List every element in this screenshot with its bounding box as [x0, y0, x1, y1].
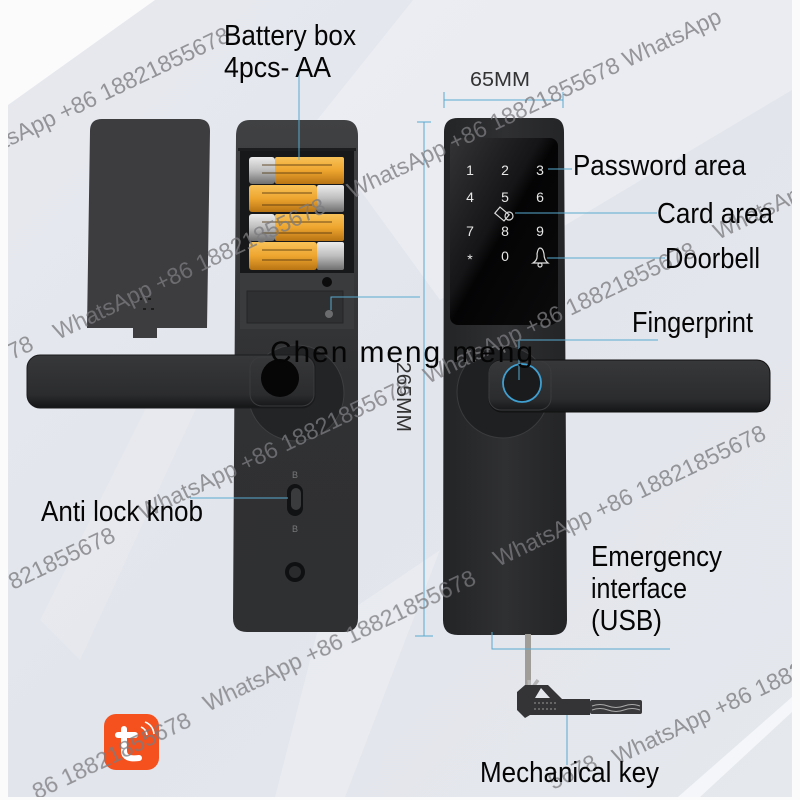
panel: front of lock — [443, 118, 770, 635]
touch keypad: 7 — [466, 223, 474, 239]
anti lock knob — [287, 470, 303, 534]
label: fingerprint: Fingerprint — [632, 307, 753, 339]
label: card area: Card area — [657, 198, 774, 230]
label: mechanical key: Mechanical key — [480, 757, 659, 789]
label: emergency interface: (USB) — [591, 605, 662, 637]
icon: Tuya app logo — [104, 714, 159, 770]
battery 1 — [249, 157, 344, 184]
watermarks: 821855678 — [4, 521, 119, 595]
touch keypad — [450, 138, 558, 325]
label: emergency interface: interface — [591, 573, 687, 605]
right handle with fingerprint sensor — [489, 360, 770, 412]
label: battery box: Battery box — [224, 20, 356, 52]
battery 2 — [249, 185, 344, 212]
touch keypad: 4 — [466, 189, 474, 205]
watermarks: WhatsApp +86 18821855678 WhatsApp — [343, 3, 725, 204]
touch keypad: 8 — [501, 223, 509, 239]
emergency keyhole — [285, 562, 305, 582]
touch keypad: 2 — [501, 162, 509, 178]
panel: battery cover — [87, 119, 210, 338]
touch keypad: * — [467, 251, 473, 267]
label: doorbell: Doorbell — [665, 243, 760, 275]
watermarks: WhatsApp +86 18821855678 — [419, 236, 700, 389]
label: password area: Password area — [573, 150, 747, 182]
anti lock knob: B — [292, 470, 298, 480]
rose left — [248, 345, 344, 441]
fingerprint ring — [503, 364, 541, 402]
touch keypad: 9 — [536, 223, 544, 239]
icon: card — [495, 207, 513, 221]
watermarks: WhatsApp +86 18821855678 — [199, 564, 480, 717]
watermarks: 78 — [3, 330, 37, 365]
watermarks: WhatsApp +86 18821855678 — [489, 419, 770, 572]
icon: doorbell — [533, 248, 548, 267]
battery 3 — [249, 214, 344, 241]
battery 4 — [249, 242, 344, 270]
touch keypad: 1 — [466, 162, 474, 178]
watermarks: 5678 — [544, 749, 601, 795]
label: emergency interface: Emergency — [591, 541, 722, 573]
dimension: width: 65MM — [470, 69, 530, 91]
battery compartment — [240, 151, 354, 273]
leader lines and dimension brackets — [190, 72, 670, 765]
panel: back of lock with battery box — [233, 120, 358, 632]
touch keypad: 0 — [501, 248, 509, 264]
reset panel — [240, 273, 354, 329]
touch keypad: 5 — [501, 189, 509, 205]
left handle — [27, 355, 315, 408]
label: battery box — [224, 20, 356, 84]
dimension: height: 265MM — [392, 362, 414, 432]
label: seller name: Chen meng meng — [270, 336, 533, 369]
watermarks: WhatsApp +86 18821855678 — [49, 192, 330, 345]
rose right — [457, 346, 549, 438]
label: emergency interface — [591, 541, 722, 637]
touch keypad: 3 — [536, 162, 544, 178]
label: anti lock knob: Anti lock knob — [41, 496, 203, 528]
touch keypad: 6 — [536, 189, 544, 205]
anti lock knob: B — [292, 524, 298, 534]
watermarks: WhatsApp +86 18821855678 — [134, 372, 415, 525]
mechanical key — [517, 634, 642, 718]
label: battery box: 4pcs- AA — [224, 52, 332, 84]
